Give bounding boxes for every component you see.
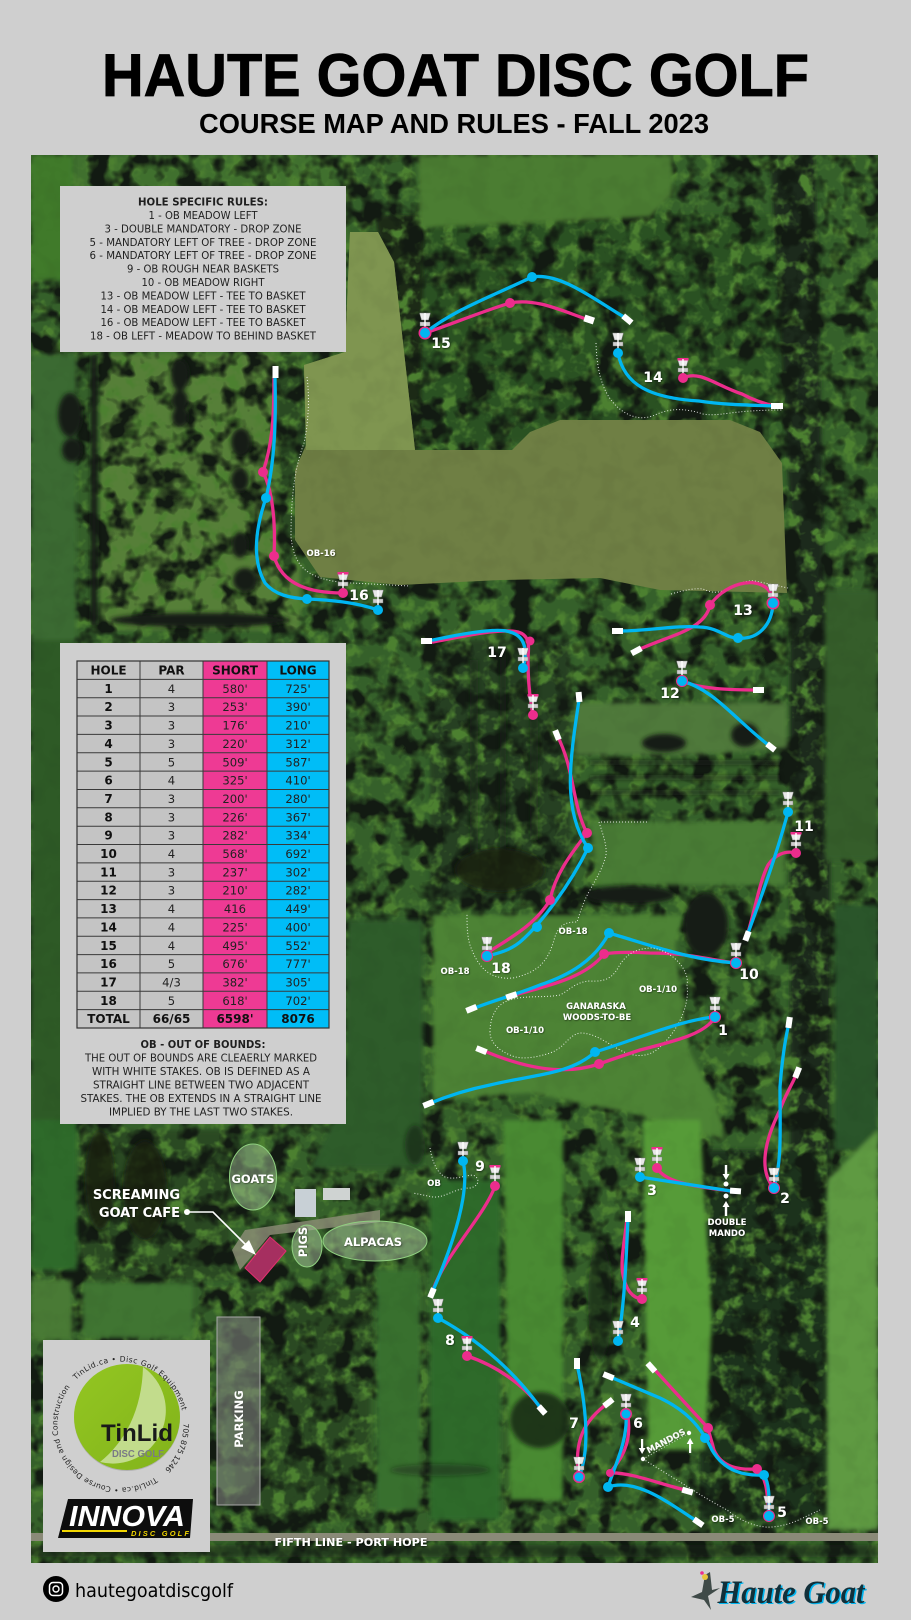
par column: 5 (168, 994, 175, 1008)
par column: 4 (168, 902, 175, 916)
table header: LONG (279, 664, 317, 678)
pigs enclosure: PIGS (296, 1227, 310, 1257)
hole 5 with mandos: OB-5 (805, 1517, 829, 1527)
hole 3 with double mandatory: DOUBLE (708, 1218, 747, 1228)
rules list: 3 - DOUBLE MANDATORY - DROP ZONE (104, 223, 302, 235)
subtitle: COURSE MAP AND RULES - FALL 2023 (199, 108, 709, 139)
rules list: 13 - OB MEADOW LEFT - TEE TO BASKET (100, 290, 306, 302)
haute goat logo: Haute Goat (717, 1575, 865, 1611)
long distance column: 282' (285, 884, 311, 898)
table header: PAR (158, 664, 185, 678)
rules list: 16 - OB MEADOW LEFT - TEE TO BASKET (100, 317, 306, 329)
hole 1: WOODS-TO-BE (563, 1013, 631, 1023)
out of bounds text: WITH WHITE STAKES. OB IS DEFINED AS A (92, 1066, 311, 1078)
hole 3 with double mandatory: 3 (647, 1183, 657, 1199)
hole 1: OB-1/10 (506, 1026, 544, 1036)
hole 12: 12 (660, 686, 680, 702)
short distance column: 509' (222, 755, 248, 769)
short distance column: 176' (222, 718, 248, 732)
short distance column: 618' (222, 994, 248, 1008)
long distance column: 449' (285, 902, 311, 916)
hole 8 (432, 1299, 548, 1416)
long distance column: 305' (285, 975, 311, 989)
par column: 5 (168, 957, 175, 971)
par column: 3 (168, 829, 175, 843)
table total row: 8076 (281, 1012, 315, 1026)
rules list: 6 - MANDATORY LEFT OF TREE - DROP ZONE (90, 250, 317, 262)
hole numbers column: 13 (100, 902, 117, 916)
instagram handle: hautegoatdiscgolf (75, 1580, 234, 1602)
long distance column: 777' (285, 957, 311, 971)
par column: 3 (168, 737, 175, 751)
table total row: TOTAL (87, 1012, 130, 1026)
hole 4: 4 (630, 1315, 640, 1331)
long distance column: 210' (285, 718, 311, 732)
out of bounds text: THE OUT OF BOUNDS ARE CLEAERLY MARKED (84, 1052, 317, 1064)
table total row: 6598' (216, 1012, 254, 1026)
hole 8: 8 (445, 1333, 455, 1349)
table total row (87, 1012, 315, 1026)
out of bounds text: IMPLIED BY THE LAST TWO STAKES. (109, 1106, 293, 1118)
screaming goat cafe label and arrow: GOAT CAFE (99, 1206, 180, 1221)
screaming goat cafe label and arrow (93, 1188, 256, 1255)
hole 18: 18 (491, 961, 511, 977)
hole 11: 11 (794, 819, 814, 835)
circular logo text: TinLid.ca • Disc Golf Equipment 705 875 1246 TinLid.ca • Course Design and Construction (52, 1356, 189, 1492)
hole numbers column: 5 (104, 755, 113, 769)
hole 3 with double mandatory (634, 1147, 747, 1239)
rules list: 18 - OB LEFT - MEADOW TO BEHIND BASKET (90, 331, 316, 343)
hole 16: 16 (349, 588, 369, 604)
instagram icon (43, 1576, 69, 1602)
hole numbers column: 15 (100, 939, 117, 953)
hole 1: GANARASKA (566, 1002, 626, 1012)
parking area (217, 1317, 260, 1505)
alpacas enclosure (323, 1221, 427, 1261)
par column: 3 (168, 792, 175, 806)
hole 5 with mandos: OB-5 (711, 1515, 735, 1525)
hole 6 (603, 1394, 705, 1528)
long distance column: 367' (285, 810, 311, 824)
short distance column: 253' (222, 700, 248, 714)
long distance column: 552' (285, 939, 311, 953)
out of bounds heading: OB - OUT OF BOUNDS: (140, 1039, 266, 1051)
panel: hole specific rules (60, 186, 346, 352)
rules list: 10 - OB MEADOW RIGHT (142, 277, 265, 289)
cafe building (245, 1237, 286, 1282)
long distance column: 725' (285, 682, 311, 696)
out of bounds text (80, 1052, 322, 1118)
short distance column: 325' (222, 774, 248, 788)
hole 2 (765, 1017, 802, 1207)
tinlid disc logo (74, 1364, 180, 1471)
hole 15: 15 (431, 336, 451, 352)
hole numbers column: 18 (100, 994, 117, 1008)
hole numbers column: 10 (100, 847, 117, 861)
par column: 4 (168, 774, 175, 788)
hole numbers column: 9 (104, 829, 113, 843)
hole 17: 17 (487, 645, 507, 661)
road name: FIFTH LINE - PORT HOPE (274, 1536, 428, 1549)
hole numbers column: 16 (100, 957, 117, 971)
hole 6: 6 (633, 1416, 643, 1432)
short distance column: 495' (222, 939, 248, 953)
hole 18: OB-18 (558, 927, 588, 937)
hole numbers column: 6 (104, 774, 113, 788)
rules heading: HOLE SPECIFIC RULES: (138, 196, 268, 208)
hole numbers column: 3 (104, 718, 113, 732)
hole 3 with double mandatory: MANDO (709, 1229, 745, 1239)
short distance column: 237' (222, 865, 248, 879)
par column: 4 (168, 939, 175, 953)
hole 5 with mandos: MANDOS (645, 1427, 688, 1456)
hole 17 (421, 630, 538, 720)
long distance column: 587' (285, 755, 311, 769)
par column: 4 (168, 847, 175, 861)
long distance column: 280' (285, 792, 311, 806)
short distance column: 200' (222, 792, 248, 806)
hole 5 with mandos: 5 (777, 1505, 787, 1521)
farm buildings (232, 1188, 380, 1270)
parking area: PARKING (232, 1390, 246, 1448)
hole 18: OB-18 (440, 967, 470, 977)
short distance column: 416 (224, 902, 246, 916)
hole 7: 7 (569, 1416, 579, 1432)
hole numbers column: 14 (100, 920, 117, 934)
alpacas enclosure: ALPACAS (344, 1235, 402, 1249)
short distance column: 220' (222, 737, 248, 751)
par column: 4/3 (162, 975, 181, 989)
hole numbers column: 11 (100, 865, 117, 879)
hole 13 (612, 581, 788, 656)
hole numbers column (100, 682, 117, 1008)
hole 13: 13 (733, 603, 753, 619)
tree shadows and orchard rows (31, 355, 878, 1557)
par column: 3 (168, 810, 175, 824)
hole 16: OB-16 (306, 549, 336, 559)
long distance column: 400' (285, 920, 311, 934)
par column: 3 (168, 718, 175, 732)
hole 7 (569, 1358, 615, 1483)
goats enclosure: GOATS (231, 1172, 275, 1186)
par column: 3 (168, 865, 175, 879)
hole numbers column: 8 (104, 810, 113, 824)
goats enclosure (230, 1144, 276, 1210)
table total row: 66/65 (153, 1012, 190, 1026)
innova logo: INNOVA (69, 1501, 185, 1533)
hole 4 (612, 1211, 648, 1346)
long distance column: 692' (285, 847, 311, 861)
hole 9: 9 (475, 1159, 485, 1175)
par column: 3 (168, 884, 175, 898)
rules list: 14 - OB MEADOW LEFT - TEE TO BASKET (100, 304, 306, 316)
hole numbers column: 7 (104, 792, 113, 806)
long distance column: 312' (285, 737, 311, 751)
innova logo: DISC GOLF (131, 1529, 189, 1538)
out of bounds text: STAKES. THE OB EXTENDS IN A STRAIGHT LINE (80, 1093, 322, 1105)
short distance column: 580' (222, 682, 248, 696)
hole 12 (660, 661, 777, 752)
scorecard table (77, 661, 329, 1028)
long distance column: 410' (285, 774, 311, 788)
short distance column: 210' (222, 884, 248, 898)
panel: scorecard and OB rules (60, 643, 346, 1124)
short distance column: 226' (222, 810, 248, 824)
hole 9 (413, 1142, 500, 1299)
tinlid disc logo: DISC GOLF (112, 1449, 164, 1460)
hole numbers column: 12 (100, 884, 117, 898)
par column: 5 (168, 755, 175, 769)
par column: 3 (168, 700, 175, 714)
out of bounds text: STRAIGHT LINE BETWEEN TWO ADJACENT (93, 1080, 310, 1092)
pigs enclosure (292, 1225, 322, 1267)
hole 10 (465, 928, 759, 1014)
hole 14: 14 (643, 370, 663, 386)
hole 9: OB (427, 1179, 441, 1189)
screaming goat cafe label and arrow: SCREAMING (93, 1188, 180, 1203)
table header: HOLE (90, 664, 127, 678)
goat icon (691, 1571, 720, 1610)
hole 18 (440, 692, 647, 978)
road (31, 1533, 878, 1541)
long distance column: 702' (285, 994, 311, 1008)
hay field (295, 232, 787, 593)
hole numbers column: 17 (100, 975, 117, 989)
hole numbers column: 4 (104, 737, 113, 751)
short distance column (222, 682, 248, 1008)
hole 1 (422, 948, 728, 1109)
short distance column: 568' (222, 847, 248, 861)
table header (90, 664, 317, 678)
par column (162, 682, 181, 1008)
hole 11 (742, 792, 814, 942)
par column: 4 (168, 920, 175, 934)
hole 15 (418, 272, 634, 352)
hole 14 (596, 333, 783, 418)
short distance column: 282' (222, 829, 248, 843)
short distance column: 225' (222, 920, 248, 934)
rules list: 9 - OB ROUGH NEAR BASKETS (127, 264, 279, 276)
long distance column (285, 682, 311, 1008)
par column: 4 (168, 682, 175, 696)
title: HAUTE GOAT DISC GOLF (102, 42, 809, 109)
hole 5 with mandos (602, 1361, 829, 1527)
innova logo (58, 1499, 193, 1538)
long distance column: 334' (285, 829, 311, 843)
rules list: 5 - MANDATORY LEFT OF TREE - DROP ZONE (90, 237, 317, 249)
long distance column: 302' (285, 865, 311, 879)
hole 1: OB-1/10 (639, 985, 677, 995)
tinlid disc logo: TinLid (101, 1420, 173, 1447)
long distance column: 390' (285, 700, 311, 714)
script wordmark: Haute Goat (718, 1576, 867, 1612)
hole numbers column: 1 (104, 682, 113, 696)
short distance column: 382' (222, 975, 248, 989)
rules list: 1 - OB MEADOW LEFT (148, 210, 258, 222)
hole numbers column: 2 (104, 700, 113, 714)
table header: SHORT (212, 664, 259, 678)
hole 1: 1 (718, 1023, 728, 1039)
panel: sponsor logos (43, 1340, 210, 1552)
short distance column: 676' (222, 957, 248, 971)
hole 16 (256, 366, 410, 615)
hole 10: 10 (739, 967, 759, 983)
hole 2: 2 (780, 1191, 790, 1207)
rules list (90, 210, 317, 343)
